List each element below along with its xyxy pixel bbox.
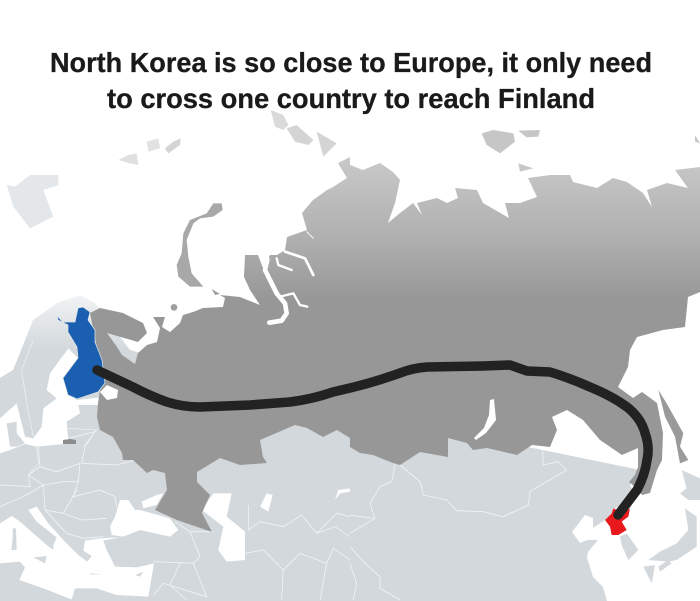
title — [50, 47, 652, 114]
map: Russia — [90, 157, 700, 532]
map: North Korea — [605, 508, 630, 535]
country borders — [22, 340, 97, 473]
map: Kaliningrad — [63, 439, 76, 444]
map: Korea and Japan — [620, 470, 700, 583]
title: North Korea is so close to Europe, it only need — [50, 47, 652, 78]
title: to cross one country to reach Finland — [107, 83, 595, 114]
seas: Caspian, Aral, Balkhash — [202, 488, 350, 562]
seas: Mediterranean and Black Sea — [0, 493, 178, 599]
map: Sakhalin — [658, 390, 688, 463]
Mediterranean islands — [11, 528, 143, 577]
map: Arctic islands — [7, 110, 700, 311]
route line: Finland to North Korea — [97, 365, 648, 515]
map: Eurasia land — [0, 295, 640, 601]
map: Russian Arctic bays — [264, 232, 313, 323]
seas: Baltic — [0, 348, 100, 453]
Denmark — [7, 422, 25, 447]
map: Finland — [57, 307, 105, 399]
map: Lake Baikal — [474, 399, 496, 440]
map: Lake Ladoga — [100, 385, 118, 400]
